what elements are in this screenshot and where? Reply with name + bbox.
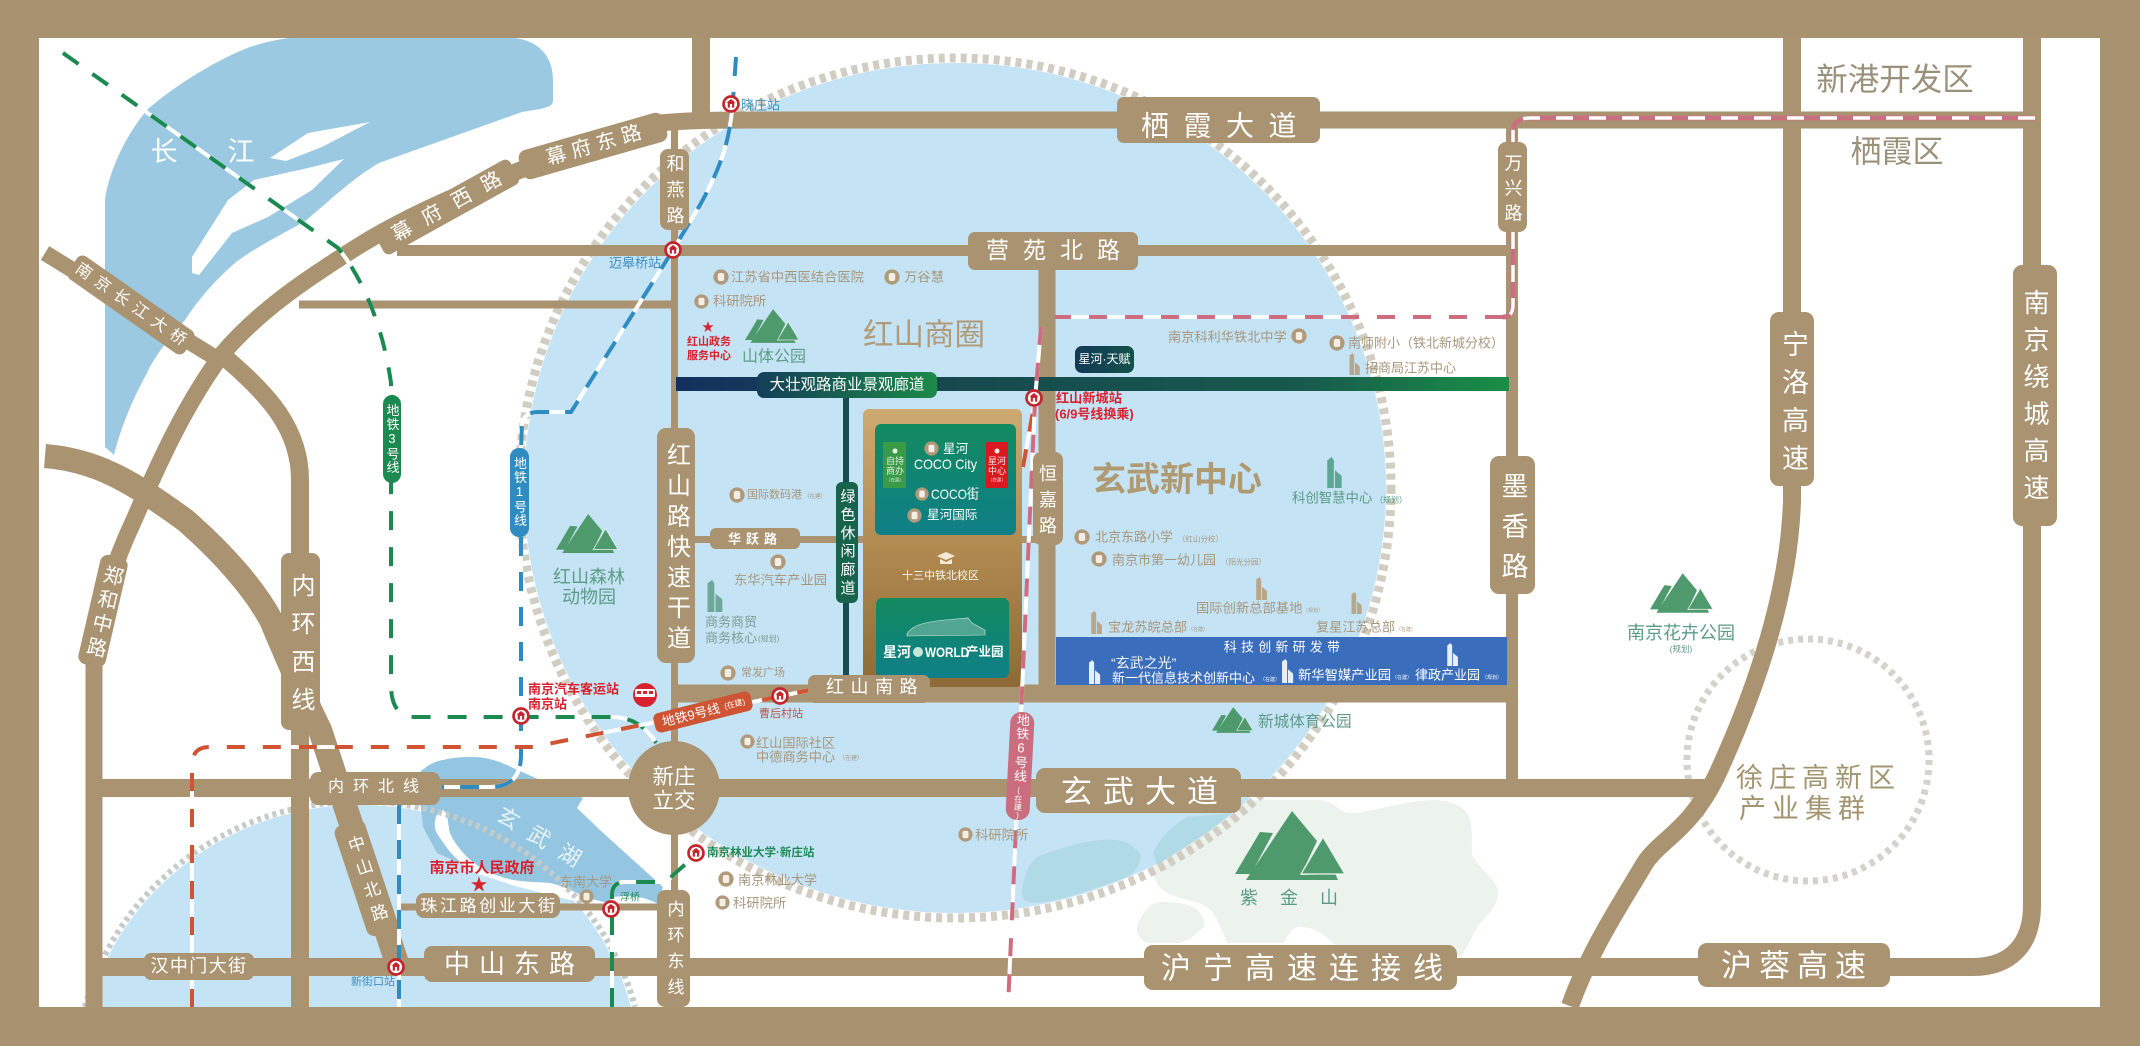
station: 南京站: 南京站 [528,696,567,712]
road label: 墨香路: 墨香路 [1498,472,1528,592]
poi: 招商局江苏中心 [1350,353,1456,376]
poi: 南师附小: 南师附小（铁北新城分校） [1348,336,1504,350]
poi: 红山国际社区: 中德商务中心 [756,750,835,764]
metro tag: 地铁3号线 [383,395,401,483]
station: 南京站 [514,682,619,723]
road label: 万兴路 [1498,142,1527,232]
Xuzhuang dashed ring [1687,639,1929,881]
road label: 中山北路: 中山北路 [343,833,392,930]
panel: commercial: （在建） [988,476,1006,484]
interchange: 新庄立交 [628,741,720,835]
poi: 南京市第一幼儿园: （阳光分园） [1221,556,1266,566]
metro line 9 [192,400,1035,1007]
science and innovation band: “玄武之光” [1111,655,1177,671]
metro tag: 地铁9号线: (在建) [723,696,746,711]
park: 南京花卉公园: 南京花卉公园 [1627,623,1735,643]
government: 红山政务服务中心: 服务中心 [687,348,731,362]
panel: commercial: 星河 [988,455,1006,466]
place: 长江: 江 [228,137,254,167]
poi: 国际数码港: （在建） [804,492,826,500]
station: 南京林业大学新庄站 [689,845,815,860]
road label: 宁洛高速 [1770,312,1814,486]
poi: 商务核心: 商务商贸 [705,614,757,630]
road label: 万兴路: 万兴路 [1502,154,1522,228]
panel: commercial: 中心 [988,465,1006,476]
metro tag: 地铁6号线 [1005,711,1035,821]
place: 新港开发区: 新港开发区 [1816,61,1974,97]
poi: 宝龙苏皖总部 [1091,611,1208,634]
park: 红山森林动物园: 动物园 [562,587,616,607]
science and innovation band: （在建） [1260,676,1280,683]
station: 曹后村站: 曹后村站 [759,706,803,720]
poi: 科创智慧中心 [1292,457,1407,506]
metro tag: 地铁6号线: (在建) [1013,786,1023,820]
place: 长江 [150,137,254,167]
corridor label: 绿色休闲廊道: 绿色休闲廊道 [838,488,856,598]
road label: 和燕路 [660,149,689,232]
science and innovation band: （规划） [1482,674,1502,681]
park: 紫金山 [1235,811,1360,908]
metro tag: 地铁3号线: 地铁3号线 [384,404,400,474]
road label: 红山路快速干道 [657,428,695,663]
government: 红山政务服务中心 [687,320,731,362]
poi: 万谷慧: 万谷慧 [904,270,944,284]
road label: 华跃路 [710,528,800,549]
interchange: 新庄立交: 立交 [652,789,696,813]
park: 山体公园 [742,309,806,366]
government: 红山政务服务中心: 红山政务 [687,334,731,348]
poi: 江苏省中西医结合医院: 江苏省中西医结合医院 [731,270,864,284]
poi: 常发广场: 常发广场 [741,665,785,679]
road label: 南京长江大桥: 南京长江大桥 [72,259,195,353]
road label: 营苑北路 [968,232,1138,270]
poi: 商务核心: (规划) [758,634,780,644]
road label: 幕府东路: 幕府东路 [544,119,650,170]
school label: 十三中铁北校区 [902,568,979,582]
road label: 玄武大道 [1036,768,1241,813]
panel: WORLD industrial park: 星河 [883,644,911,660]
poi: 商务核心: 商务核心 [705,630,757,646]
station: 新街口站: 新街口站 [351,974,395,988]
poi: 复星江苏总部 [1316,592,1416,634]
metro line 6 [1008,118,2035,1007]
road label: 中山东路: 中山东路 [444,949,584,979]
science and innovation band: 律政产业园 [1415,668,1480,682]
poi: 北京东路小学: （红山分校） [1178,534,1223,544]
road label: 栖霞大道 [1117,97,1320,143]
station: 曹后村站 [759,689,803,720]
road label: 内环北线 [310,772,440,805]
road label: 南京绕城高速: 南京绕城高速 [2020,289,2050,511]
panel: commercial: 星河 [943,442,969,456]
government: 南京市人民政府 [429,858,535,894]
road label: 沪蓉高速 [1698,943,1890,987]
Xinjiekou dashed ring [85,801,635,1007]
park: 南京花卉公园 [1627,573,1735,654]
road label: 营苑北路: 营苑北路 [986,237,1134,263]
park: 山体公园: 山体公园 [742,348,806,366]
poi: 北京东路小学 [1074,529,1223,545]
panel: commercial: 星河国际 [927,508,977,522]
place: 栖霞区: 栖霞区 [1850,134,1944,170]
metro tag: 地铁1号线 [510,448,529,537]
tag: 星河天赋 [1075,346,1134,373]
road label: 沪宁高速连接线 [1144,945,1457,990]
road label: 内环北线: 内环北线 [328,778,428,796]
road label: 南京绕城高速 [2013,265,2057,526]
station: 红山新城站 [1027,390,1134,422]
science and innovation band [1056,637,1507,686]
ponds near Zijin [1022,813,1232,903]
place: 徐庄高新区: 产业集群 [1739,794,1871,824]
poi: 东华汽车产业园 [734,554,827,588]
panel: commercial: 商办 [886,465,904,476]
place: 徐庄高新区: 徐庄高新区 [1736,763,1901,793]
road label: 墨香路 [1490,456,1535,594]
Yangtze river with islands [105,38,553,455]
station: 迈皋桥站 [609,243,680,270]
panel: commercial: COCO City [914,456,977,472]
road label: 珠江路创业大街: 珠江路创业大街 [420,896,558,916]
place: 玄武湖: 玄武湖 [492,802,598,879]
poi: 科研院所 south: 科研院所 [733,896,786,910]
school label [902,552,979,582]
heading: 玄武新中心: 玄武新中心 [1092,461,1262,499]
poi: 东南大学: 东南大学 [560,874,612,890]
poi: 北京东路小学: 北京东路小学 [1095,530,1173,544]
road label: 恒嘉路 [1033,452,1063,545]
science and innovation band: 新一代信息技术创新中心 [1112,670,1255,686]
big circle dashed ring [519,58,1391,918]
panel: WORLD industrial park: 产业园 [966,644,1004,659]
government: 红山政务服务中心: ★ [702,320,714,334]
stations [351,97,1134,988]
panel: WORLD industrial park: WORLD [925,644,969,660]
park: 南京花卉公园: (规划) [1670,644,1692,654]
road label: 红山南路: 红山南路 [826,677,924,697]
station: 新街口站 [351,960,403,988]
panel: commercial: COCO街 [931,486,979,502]
station: 晓庄站 [724,97,780,112]
poi: 招商局江苏中心: 招商局江苏中心 [1365,360,1456,376]
road label: 内环东线: 内环东线 [664,900,684,1004]
Hongshan main circle area [524,63,1386,913]
interchange: 新庄立交: 新庄 [652,765,696,789]
poi: 商务核心 [705,580,780,646]
poi: 国际创新总部基地 [1196,577,1323,616]
road label: 宁洛高速: 宁洛高速 [1778,330,1808,482]
station: 南京林业大学新庄站: 南京林业大学·新庄站 [707,845,815,859]
road label: 红山南路 [808,675,930,703]
poi: 南京市第一幼儿园 [1091,551,1266,568]
panel: WORLD industrial park [876,598,1009,678]
road label: 内环东线 [657,890,690,1007]
poi: 科研院所 center: 科研院所 [975,828,1028,842]
station: 南京站: 南京汽车客运站 [528,682,619,696]
Zijin mountain green area [1137,800,1498,957]
road label: 幕府西路: 幕府西路 [388,160,518,246]
government: 南京市人民政府: 南京市人民政府 [429,858,535,876]
poi: 国际创新总部基地: （规划） [1303,607,1323,614]
station: 红山新城站: 红山新城站 [1056,390,1122,406]
poi: 红山国际社区: （在建） [839,754,863,762]
Xinjiekou circle area [89,805,631,1007]
station: 迈皋桥站: 迈皋桥站 [609,256,661,270]
icon: bus terminal [633,683,657,707]
metro tag: 地铁9号线: 地铁9号线 [660,701,722,729]
metro tag: 地铁1号线: 地铁1号线 [512,457,527,527]
poi: 红山国际社区: 红山国际社区 [756,736,835,750]
poi: 复星江苏总部: 复星江苏总部 [1316,620,1395,634]
panel: commercial: （在建） [886,476,904,484]
road label: 中山东路 [424,946,595,982]
road label: 内环西线: 内环西线 [287,573,315,725]
poi: 国际创新总部基地: 国际创新总部基地 [1196,600,1302,616]
poi: 复星江苏总部: （在建） [1396,626,1416,633]
landscape corridor bar [676,377,1509,391]
corridor label: 大壮观路: 大壮观路商业景观廊道 [769,376,925,394]
road label: 栖霞大道: 栖霞大道 [1141,110,1311,142]
corridor label: 大壮观路 [757,372,937,398]
poi: 科创智慧中心: （规划） [1375,494,1407,504]
place: 长江: 长 [150,137,178,167]
poi: 宝龙苏皖总部: 宝龙苏皖总部 [1108,620,1187,634]
park: 红山森林动物园: 红山森林 [553,567,625,587]
road label: 沪宁高速连接线: 沪宁高速连接线 [1161,952,1455,986]
place: 徐庄高新区 [1736,763,1901,824]
park: 紫金山: 紫金山 [1240,888,1360,908]
poi: 科创智慧中心: 科创智慧中心 [1292,490,1372,506]
road label: 红山路快速干道: 红山路快速干道 [662,442,690,656]
poi: 东南大学 [560,874,612,904]
road label: 幕府东路 [517,111,669,181]
road label: 内环西线 [281,553,320,730]
road label: 沪蓉高速: 沪蓉高速 [1721,948,1873,984]
road label: 玄武大道: 玄武大道 [1061,774,1229,810]
tag: 星河天赋: 星河·天赋 [1078,352,1130,366]
road label: 和燕路: 和燕路 [664,154,684,232]
poi: 万谷慧 [884,269,944,285]
government: 南京市人民政府: ★ [470,876,488,894]
park: 新城体育公园 [1212,707,1352,733]
poi: 南京林业大学: 南京林业大学 [738,872,817,888]
road label: 华跃路: 华跃路 [728,532,782,546]
park: 新城体育公园: 新城体育公园 [1258,712,1352,730]
panel: commercial: 自持 [886,455,904,466]
project plot [863,409,1022,687]
poi: 东华汽车产业园: 东华汽车产业园 [734,572,827,588]
metro line 1 [399,57,736,1007]
station: 红山新城站: (6/9号线换乘) [1055,406,1134,422]
road label: 汉中门大街: 汉中门大街 [150,956,248,976]
poi: 红山国际社区 [740,734,863,764]
park: 红山森林动物园 [553,514,625,607]
poi: 宝龙苏皖总部: （在建） [1188,626,1208,633]
station: 晓庄站: 晓庄站 [741,98,780,112]
science and innovation band: （在建） [1392,674,1412,681]
metro tag: 地铁9号线 [652,690,754,734]
poi: 国际数码港 [729,487,826,503]
Xuanwu lake [420,757,663,905]
poi: 南京市第一幼儿园: 南京市第一幼儿园 [1112,552,1216,568]
road label: 恒嘉路: 恒嘉路 [1037,464,1057,542]
road label: 中山北路 [334,822,398,936]
panel: commercial [875,424,1016,535]
poi: 国际数码港: 国际数码港 [747,488,802,501]
science and innovation band: 科技创新研发带 [1224,640,1344,654]
metro line 3 [63,53,688,1007]
road label: 汉中门大街 [144,953,254,980]
road label: 郑和中路: 郑和中路 [81,562,125,663]
poi: 南京科利华铁北中学: 南京科利华铁北中学 [1168,330,1287,344]
metro tag: 地铁6号线: 地铁6号线 [1012,713,1030,783]
station: 浮桥 [604,892,640,916]
poi: 常发广场 [720,665,785,681]
station: 浮桥: 浮桥 [620,892,640,904]
science and innovation band: 新华智媒产业园 [1298,668,1391,682]
poi: 科研院所 north: 科研院所 [713,294,766,308]
heading: 红山商圈: 红山商圈 [863,318,985,352]
green leisure corridor line [843,395,849,680]
